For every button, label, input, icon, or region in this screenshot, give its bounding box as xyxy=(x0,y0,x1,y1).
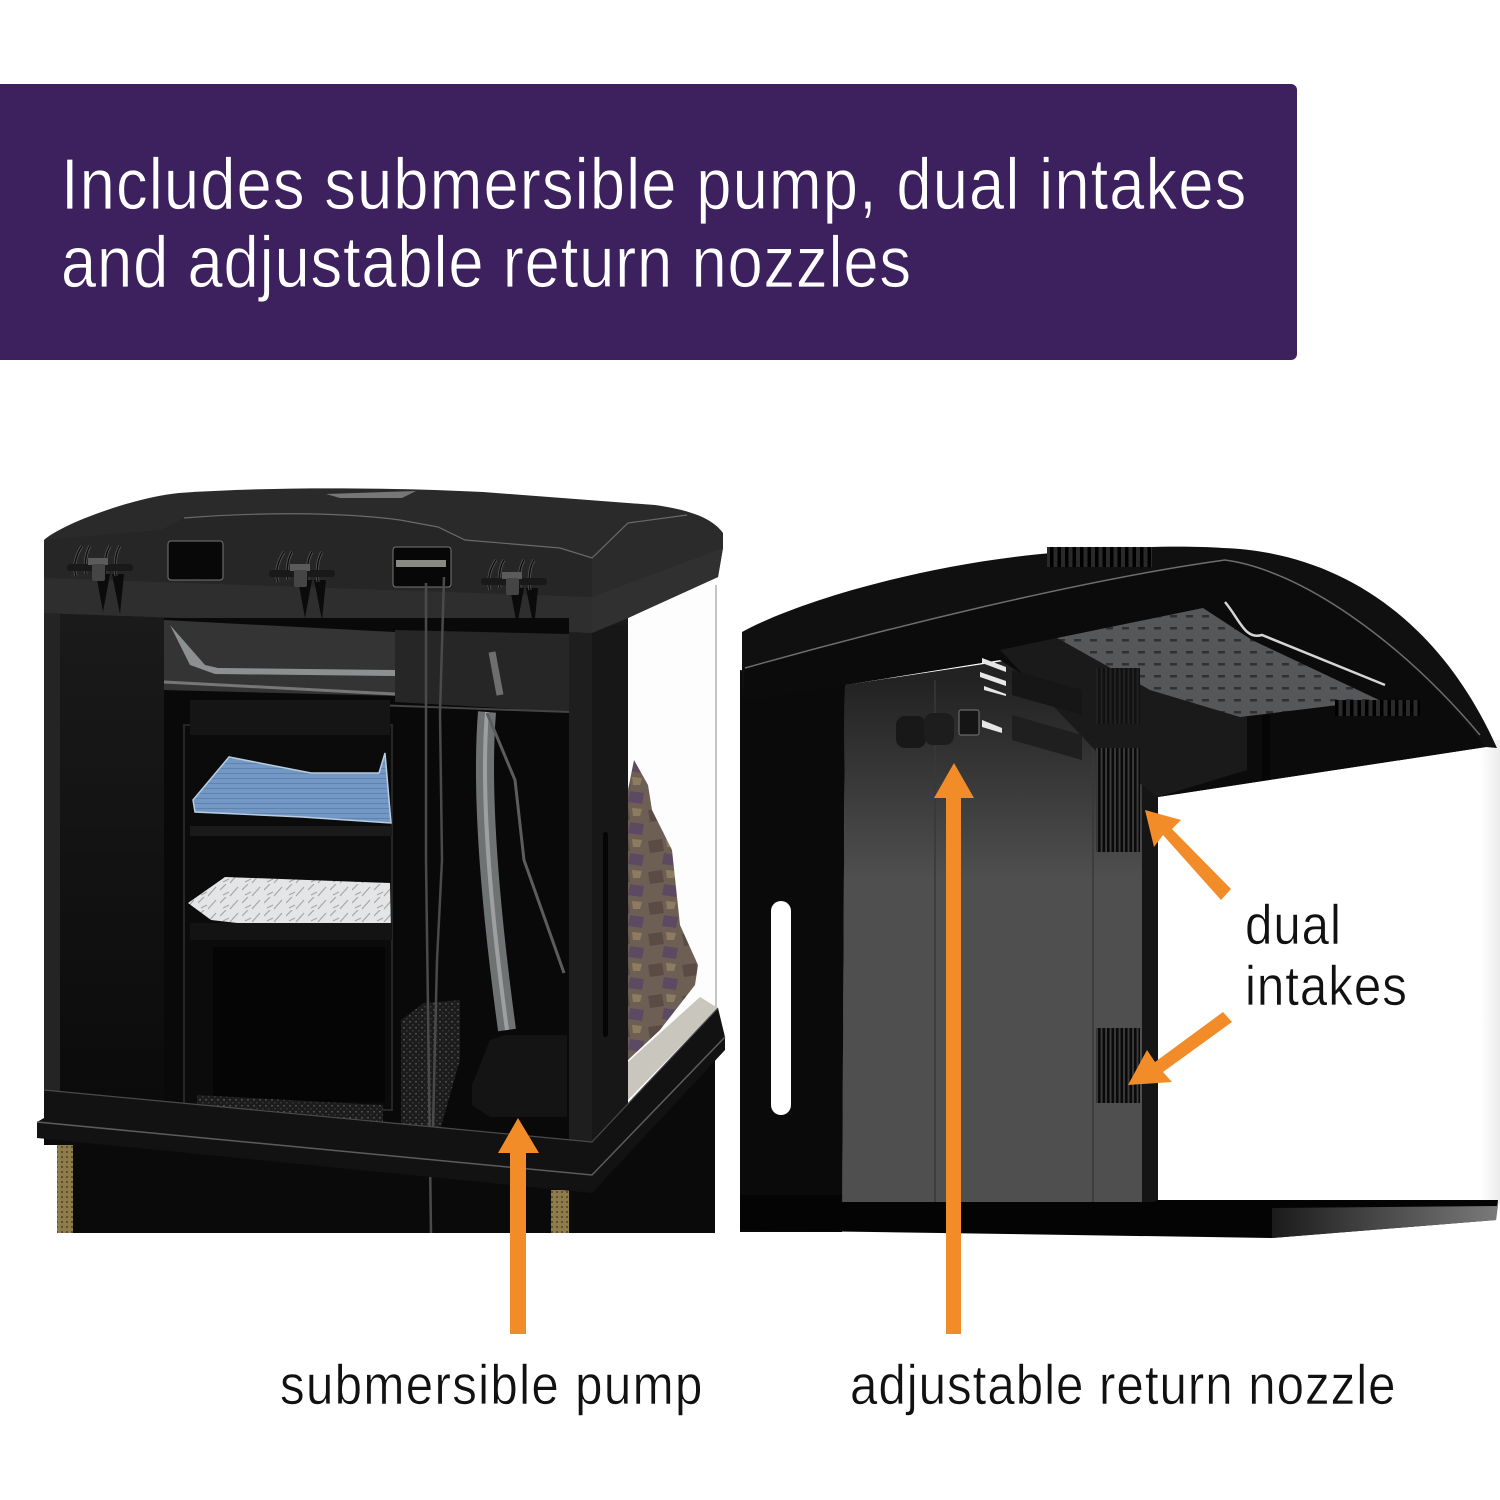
speckled floor xyxy=(197,1095,383,1125)
pump xyxy=(472,1035,567,1117)
label: adjustable return nozzle: adjustable return nozzle xyxy=(850,1354,1396,1417)
blue filter pad xyxy=(193,753,391,823)
title banner xyxy=(0,84,1297,360)
top lid grille xyxy=(1047,547,1152,567)
lid clips xyxy=(67,546,547,628)
stand xyxy=(57,1060,715,1233)
label: dual intakes xyxy=(1245,894,1407,1018)
base xyxy=(740,1195,1498,1238)
title text: Includes submersible pump, dual intakes xyxy=(61,145,1246,225)
shelf one xyxy=(190,826,392,836)
label: dual intakes: dual xyxy=(1245,894,1341,957)
label: dual intakes: intakes xyxy=(1245,955,1407,1018)
rear compartment panel xyxy=(842,640,1158,1205)
panel slots xyxy=(980,658,1082,760)
arrow: lower intake xyxy=(1128,1012,1232,1085)
filter compartment xyxy=(164,618,569,1143)
arrow: submersible pump xyxy=(498,1118,539,1334)
white stone bag xyxy=(188,877,391,932)
side wall with handle xyxy=(740,670,845,1232)
lid xyxy=(742,547,1497,797)
power cords xyxy=(426,577,564,1233)
tank back body xyxy=(44,610,628,1145)
lower media block xyxy=(213,947,385,1102)
title text: and adjustable return nozzles xyxy=(61,223,911,303)
right aquarium photo: side view xyxy=(740,547,1500,1238)
arrow: upper intake xyxy=(1145,810,1231,900)
base rim xyxy=(37,1008,725,1193)
water return band xyxy=(164,620,569,712)
media frame xyxy=(184,725,392,1110)
base highlight xyxy=(1272,1206,1498,1238)
label: submersible pump: submersible pump xyxy=(280,1354,702,1417)
sponge xyxy=(401,1000,460,1130)
tank side glass, rock and sand xyxy=(628,577,718,1100)
glass front xyxy=(1158,740,1500,1205)
intake vents xyxy=(1096,668,1140,1103)
tube xyxy=(485,712,507,1030)
left aquarium photo: rear filter compartment xyxy=(37,488,725,1233)
lid openings xyxy=(168,541,451,587)
LED panel xyxy=(1057,602,1420,717)
shelf two xyxy=(190,923,392,940)
title text xyxy=(61,145,1246,303)
return nozzle xyxy=(896,710,979,748)
lid xyxy=(44,488,723,633)
arrow: return nozzle xyxy=(934,763,974,1334)
